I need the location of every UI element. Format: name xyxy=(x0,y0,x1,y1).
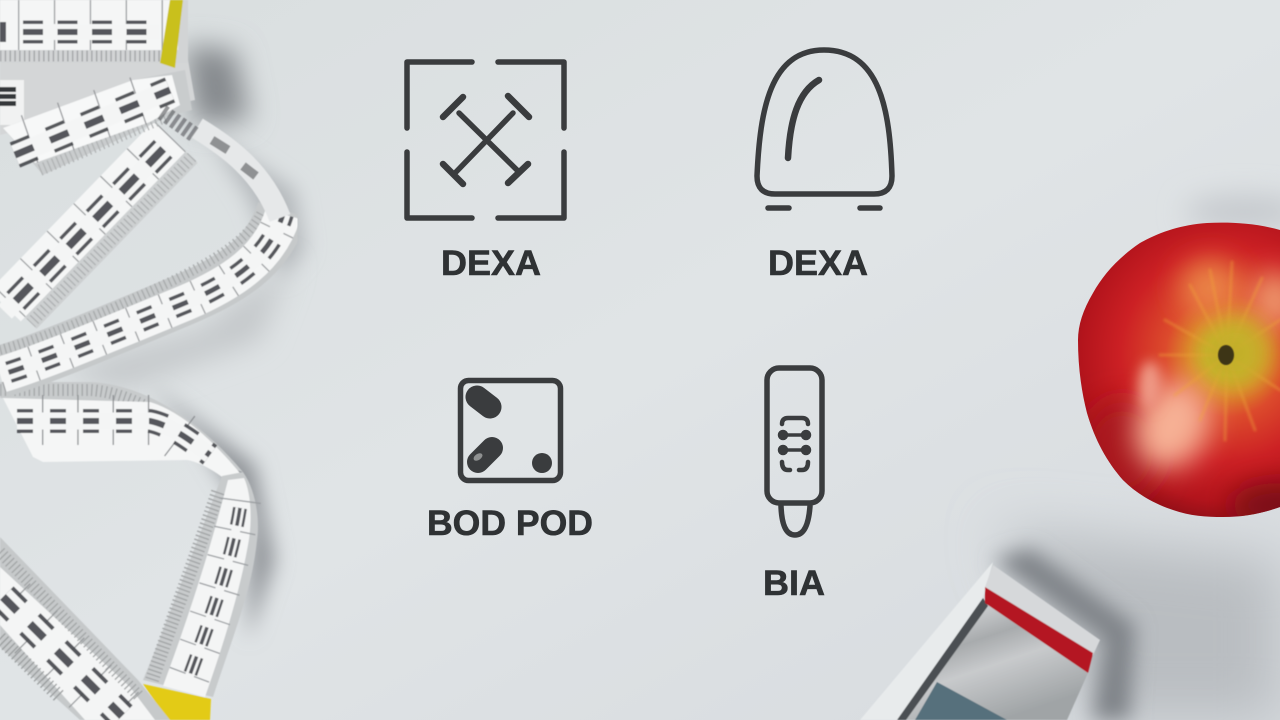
icon: BOD POD scale xyxy=(460,380,560,480)
tape: yellow end tip xyxy=(143,684,211,720)
label: BIA: BIA xyxy=(763,564,825,603)
icon: DEXA dome scanner xyxy=(757,50,892,208)
tape: upper fold xyxy=(0,60,195,175)
dumbbell xyxy=(860,562,1100,720)
tape: yellow band xyxy=(160,0,183,68)
apple xyxy=(1070,215,1280,527)
tape: vertical run xyxy=(143,472,258,697)
dumbbell: red stripe xyxy=(985,587,1093,673)
icon: DEXA scan frame xyxy=(407,62,564,218)
apple: stem xyxy=(1218,345,1234,365)
tape: top strip xyxy=(0,0,188,68)
apple: yellow core xyxy=(1202,318,1270,386)
tape: long diagonal run xyxy=(0,210,283,375)
apple: radiating streaks xyxy=(1160,262,1280,440)
tape: curved run xyxy=(0,382,243,477)
dumbbell: top rim xyxy=(985,565,1100,655)
tape: middle diagonal xyxy=(5,136,192,323)
apple: skin highlights xyxy=(1082,260,1280,527)
tape: lower left strip xyxy=(0,537,170,720)
tape: narrow twist xyxy=(197,128,280,218)
dumbbell: chrome body xyxy=(897,603,1088,720)
tape measure xyxy=(0,0,283,720)
label: DEXA left: DEXA xyxy=(441,244,541,283)
label: BOD POD: BOD POD xyxy=(427,504,593,543)
label: DEXA right: DEXA xyxy=(768,244,868,283)
dumbbell: white end cap xyxy=(860,562,993,720)
icon: BIA handheld device xyxy=(767,368,822,535)
